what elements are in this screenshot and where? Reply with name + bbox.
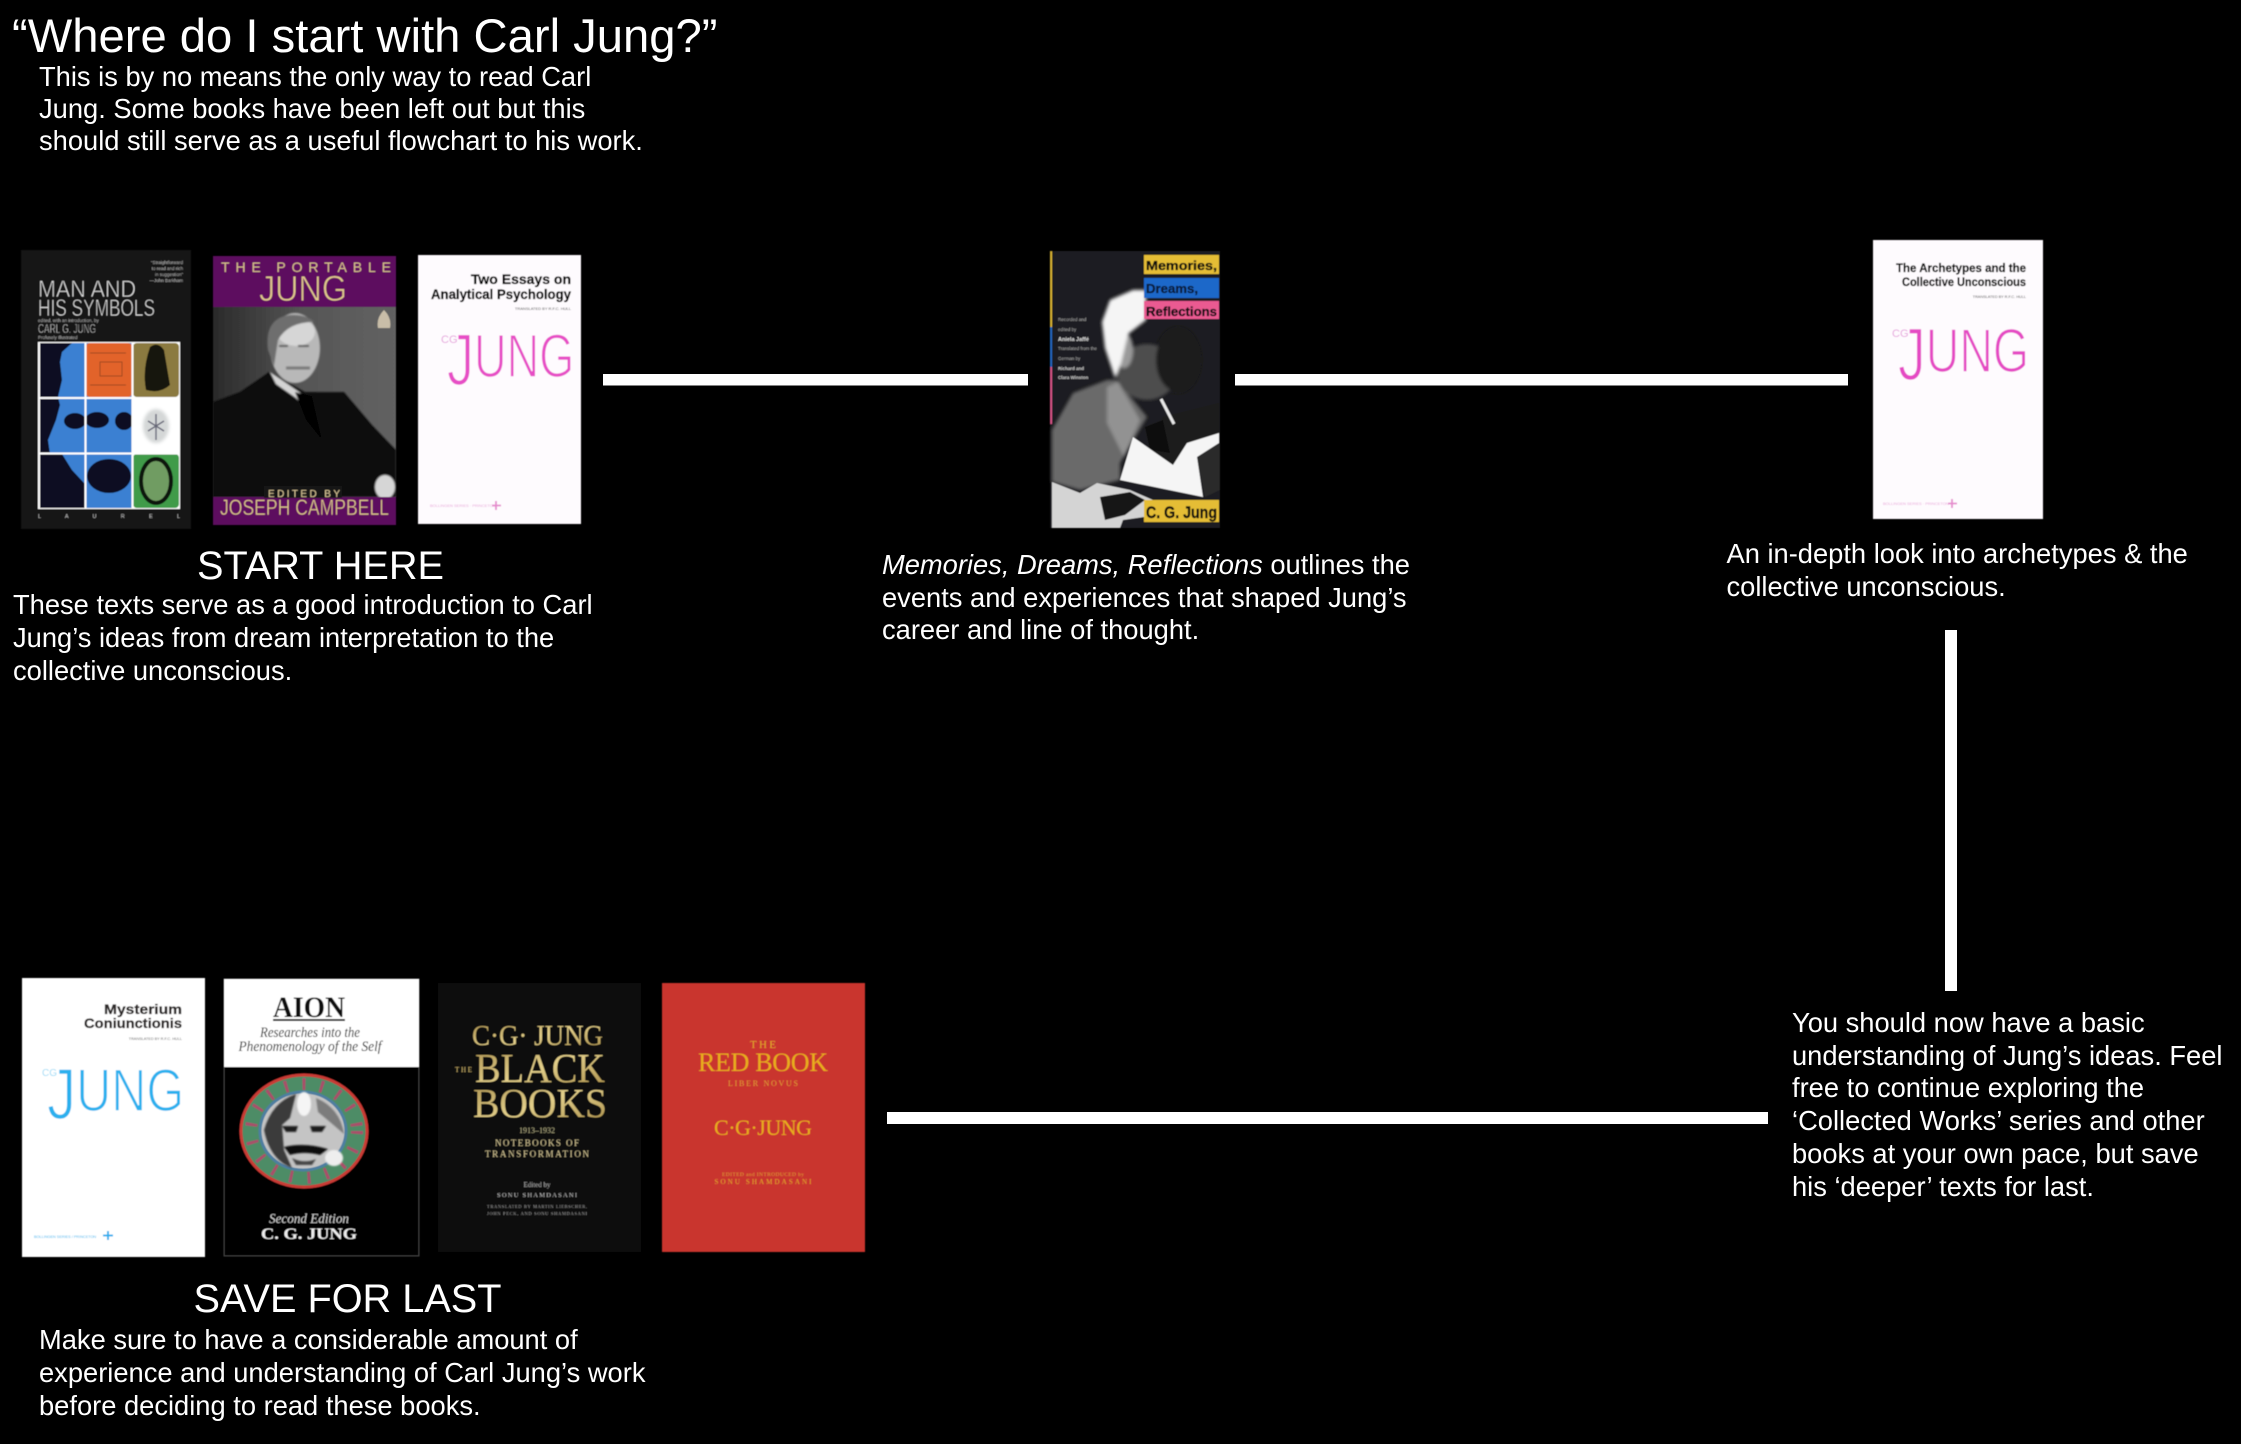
book cover: The Archetypes and the Collective Unconscious: J bbox=[1898, 313, 1926, 396]
book cover: Two Essays on Analytical Psychology bbox=[418, 255, 581, 524]
book cover: Aion: AION bbox=[273, 991, 345, 1024]
next steps description: ‘Collected Works’ series and other bbox=[1792, 1105, 2205, 1136]
title: “Where do I start with Carl Jung?” bbox=[12, 10, 717, 63]
book cover: The Red Book: SONU SHAMDASANI bbox=[714, 1178, 812, 1186]
book cover: The Black Books: 1913–1932 bbox=[519, 1126, 555, 1135]
book cover: Aion: C. G. JUNG bbox=[261, 1226, 358, 1243]
book cover: Man and His Symbols: CARL G. JUNG bbox=[38, 321, 96, 336]
save for last description: before deciding to read these books. bbox=[39, 1390, 481, 1421]
book cover: The Portable Jung: JUNG bbox=[259, 268, 347, 309]
book cover: The Black Books: SONU SHAMDASANI bbox=[497, 1192, 577, 1199]
book cover: Man and His Symbols bbox=[21, 250, 191, 529]
book cover: The Black Books: NOTEBOOKS OF bbox=[495, 1138, 579, 1148]
book cover: Memories, Dreams, Reflections: Reflections bbox=[1146, 304, 1217, 319]
next steps description: free to continue exploring the bbox=[1792, 1072, 2144, 1103]
book cover: Memories, Dreams, Reflections: Recorded and bbox=[1058, 317, 1087, 322]
save for last description bbox=[39, 1324, 646, 1421]
next steps description bbox=[1792, 1007, 2222, 1202]
book cover: Man and His Symbols: Profusely Illustrated bbox=[38, 335, 78, 340]
save for last description: experience and understanding of Carl Jung’s work bbox=[39, 1357, 646, 1388]
memories description: events and experiences that shaped Jung’s bbox=[882, 582, 1407, 613]
book cover: Man and His Symbols: to read and rich bbox=[152, 266, 183, 271]
start here description: collective unconscious. bbox=[13, 655, 292, 686]
book cover: The Archetypes and the Collective Unconscious: The Archetypes and the bbox=[1896, 263, 2026, 275]
book cover: The Portable Jung bbox=[213, 256, 396, 525]
memories description bbox=[882, 549, 1410, 645]
book cover: The Portable Jung: JOSEPH CAMPBELL bbox=[220, 495, 389, 520]
book cover: The Archetypes and the Collective Unconscious bbox=[1873, 240, 2043, 519]
book cover: The Archetypes and the Collective Unconscious: TRANSLATED BY R.F.C. HULL bbox=[1973, 295, 2026, 299]
archetypes description bbox=[1726, 538, 2188, 602]
archetypes description: collective unconscious. bbox=[1726, 571, 2006, 602]
book cover: Memories, Dreams, Reflections: edited by bbox=[1058, 327, 1077, 332]
book cover: Two Essays on Analytical Psychology: UNG bbox=[474, 322, 574, 391]
book cover: The Red Book bbox=[662, 983, 865, 1252]
book cover: The Red Book: C·G·JUNG bbox=[714, 1115, 812, 1140]
next steps description: understanding of Jung’s ideas. Feel bbox=[1792, 1040, 2222, 1071]
arrow line: start to memories bbox=[603, 374, 1028, 386]
book cover: The Black Books: TRANSFORMATION bbox=[485, 1149, 590, 1159]
book cover: Memories, Dreams, Reflections: Clara Winston bbox=[1058, 375, 1088, 380]
intro text block: Jung. Some books have been left out but this bbox=[39, 93, 585, 124]
book cover: The Red Book: RED BOOK bbox=[698, 1048, 828, 1077]
start here description bbox=[13, 589, 593, 686]
book cover: Aion: Phenomenology of the Self bbox=[238, 1039, 383, 1055]
book cover: The Black Books: C·G· JUNG bbox=[472, 1021, 603, 1052]
intro text block bbox=[39, 61, 643, 156]
book cover: Mysterium Coniunctionis: BOLLINGEN SERIES / PRINCETON bbox=[34, 1235, 96, 1239]
next steps description: books at your own pace, but save bbox=[1792, 1138, 2199, 1169]
book cover: Man and His Symbols: in suggestion” bbox=[155, 272, 183, 277]
book cover: Man and His Symbols: L A U R E L bbox=[38, 514, 180, 520]
arrow line: to save for last bbox=[887, 1112, 1768, 1124]
book cover: The Archetypes and the Collective Unconscious: CG bbox=[1892, 328, 1908, 340]
book cover: The Black Books bbox=[438, 983, 641, 1252]
book cover: The Red Book: THE bbox=[750, 1039, 776, 1051]
memories description: Memories, Dreams, Reflections outlines the bbox=[882, 549, 1410, 580]
book cover: The Black Books: TRANSLATED BY MARTIN LIEBSCHER, bbox=[487, 1204, 587, 1210]
book cover: Memories, Dreams, Reflections: Aniela Jaffé bbox=[1058, 337, 1089, 343]
start here description: These texts serve as a good introduction to Carl bbox=[13, 589, 593, 620]
book cover: Man and His Symbols: MAN AND bbox=[38, 276, 136, 303]
book cover: Man and His Symbols: —John Barkham bbox=[149, 278, 183, 283]
book cover: Man and His Symbols: “Straightforward bbox=[151, 260, 183, 265]
book cover: Memories, Dreams, Reflections: C. G. Jung bbox=[1146, 503, 1217, 522]
book cover: Two Essays on Analytical Psychology: Two Essays on bbox=[471, 271, 571, 287]
intro text block: should still serve as a useful flowchart to his work. bbox=[39, 125, 643, 156]
archetypes description: An in-depth look into archetypes & the bbox=[1726, 538, 2188, 569]
book cover: Memories, Dreams, Reflections bbox=[1050, 251, 1220, 528]
book cover: Mysterium Coniunctionis: CG bbox=[42, 1068, 57, 1079]
book cover: Two Essays on Analytical Psychology: CG bbox=[441, 334, 458, 346]
intro text block: This is by no means the only way to read Carl bbox=[39, 61, 591, 92]
book cover: Memories, Dreams, Reflections: German by bbox=[1058, 356, 1081, 361]
vertical arrow line bbox=[1945, 630, 1957, 991]
book cover: Mysterium Coniunctionis: Coniunctionis bbox=[84, 1015, 182, 1031]
book cover: Mysterium Coniunctionis: J bbox=[47, 1054, 76, 1134]
book cover: Aion bbox=[224, 979, 419, 1256]
start here description: Jung’s ideas from dream interpretation to the bbox=[13, 622, 554, 653]
book cover: The Black Books: BLACK bbox=[475, 1045, 605, 1091]
book cover: The Archetypes and the Collective Unconscious: Collective Unconscious bbox=[1902, 277, 2026, 289]
save for last heading: SAVE FOR LAST bbox=[193, 1277, 502, 1321]
book cover: Memories, Dreams, Reflections: Richard and bbox=[1058, 366, 1084, 371]
book cover: Memories, Dreams, Reflections: Translated from the bbox=[1058, 346, 1097, 351]
book cover: Memories, Dreams, Reflections: Memories, bbox=[1146, 258, 1217, 273]
next steps description: You should now have a basic bbox=[1792, 1007, 2145, 1038]
book cover: Mysterium Coniunctionis: TRANSLATED BY R.F.C. HULL bbox=[129, 1037, 182, 1041]
book cover: The Black Books: Edited by bbox=[523, 1181, 551, 1189]
save for last description: Make sure to have a considerable amount of bbox=[39, 1324, 578, 1355]
book cover: Two Essays on Analytical Psychology: TRANSLATED BY R.F.C. HULL bbox=[515, 306, 572, 311]
start here heading: START HERE bbox=[197, 544, 444, 588]
next steps description: his ‘deeper’ texts for last. bbox=[1792, 1171, 2094, 1202]
book cover: The Red Book: EDITED and INTRODUCED by bbox=[722, 1172, 804, 1178]
book cover: Mysterium Coniunctionis bbox=[22, 978, 205, 1257]
memories description: career and line of thought. bbox=[882, 614, 1199, 645]
book cover: The Red Book: LIBER NOVUS bbox=[728, 1079, 798, 1088]
book cover: The Portable Jung: EDITED BY bbox=[268, 489, 340, 500]
arrow line: memories to archetypes bbox=[1235, 374, 1848, 386]
book cover: Man and His Symbols: edited, with an introduction, by bbox=[38, 318, 100, 323]
book cover: Two Essays on Analytical Psychology: BOLLINGEN SERIES · PRINCETON bbox=[430, 503, 496, 508]
book cover: The Black Books: BOOKS bbox=[473, 1080, 607, 1126]
book cover: Aion: Researches into the bbox=[259, 1025, 360, 1041]
book cover: Aion: Second Edition bbox=[269, 1212, 349, 1227]
book cover: The Black Books: JOHN PECK, AND SONU SHAMDASANI bbox=[487, 1211, 588, 1217]
book cover: The Archetypes and the Collective Unconscious: UNG bbox=[1926, 315, 2029, 386]
book cover: Memories, Dreams, Reflections: Dreams, bbox=[1146, 281, 1198, 296]
book cover: The Archetypes and the Collective Unconscious: BOLLINGEN SERIES · PRINCETON bbox=[1883, 501, 1949, 506]
book cover: The Portable Jung: THE PORTABLE bbox=[221, 259, 391, 275]
book cover: The Black Books: THE bbox=[455, 1066, 472, 1074]
book cover: Two Essays on Analytical Psychology: Analytical Psychology bbox=[431, 286, 571, 302]
book cover: Mysterium Coniunctionis: UNG bbox=[76, 1057, 184, 1124]
book cover: Mysterium Coniunctionis: Mysterium bbox=[104, 1001, 182, 1017]
book cover: Man and His Symbols: HIS SYMBOLS bbox=[38, 295, 155, 322]
book cover: Two Essays on Analytical Psychology: J bbox=[447, 319, 474, 401]
